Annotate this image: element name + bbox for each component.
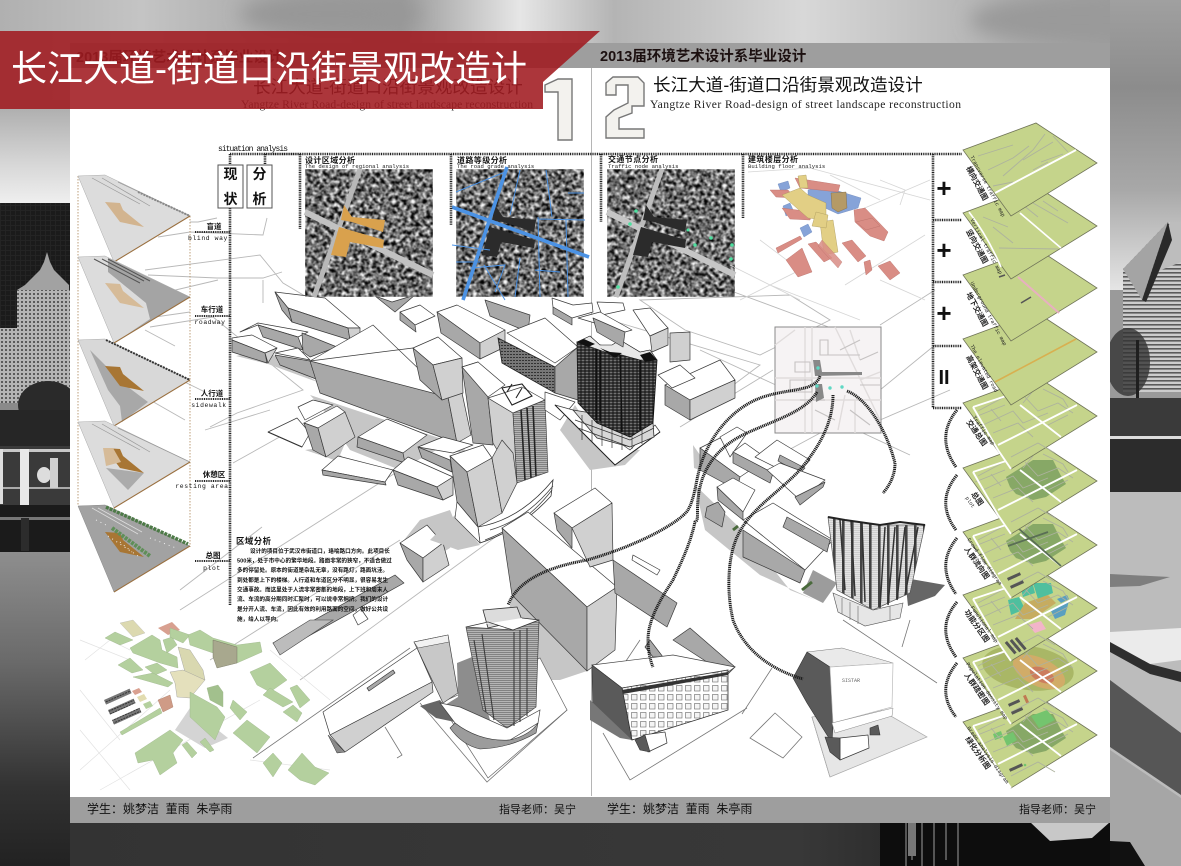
header right: school year title: 2013届环境艺术设计系毕业设计 — [600, 47, 807, 65]
operator: plus: + — [936, 235, 952, 265]
plate label: plot: plot — [964, 496, 976, 509]
mini-map legend — [104, 688, 153, 725]
tower 4 — [828, 517, 945, 626]
box: 分析 — [247, 165, 272, 208]
massing: middle right street blocks — [693, 427, 837, 603]
section plate: plot — [78, 505, 190, 592]
street section stack — [78, 175, 190, 592]
plate: transverse traffic — [963, 123, 1097, 216]
footer left: advisor: 指导老师：吴宁 — [499, 802, 576, 816]
tower 1 with curved podium — [430, 362, 553, 550]
big numeral 2 — [606, 77, 644, 138]
satellite image: regional analysis — [305, 169, 433, 297]
large slab and box over the fold — [502, 488, 677, 680]
plate label: underground traffic: Underground traffic map — [968, 281, 1007, 347]
green massing mini-map — [80, 620, 330, 790]
text block: regional analysis: 交通事故。而这里处于人流非常密集的地段，上下班和周末人 — [237, 586, 388, 594]
section plate: blind way — [78, 175, 190, 262]
label: blind way: 盲道 — [206, 221, 222, 231]
plate label: elevated road: The elevated road — [968, 344, 999, 393]
dotted structure lines — [195, 154, 962, 605]
caption: regional analysis: 设计区域分析 — [305, 155, 355, 165]
label: plot: 总图 — [206, 550, 220, 560]
footer right: advisor: 指导老师：吴宁 — [1019, 802, 1096, 816]
text block: regional analysis: 到处都是上下的楼梯。人行道和车道区分不明显，很容易发生 — [237, 576, 388, 584]
plate: green analysis — [963, 695, 1097, 788]
caption: road grade analysis: The road grade analysis — [457, 163, 534, 170]
poster sheet — [70, 43, 1110, 797]
ground plan lines — [145, 218, 950, 782]
label: plot: plot — [203, 565, 221, 572]
big numeral 1 — [545, 79, 572, 140]
text block: regional analysis: 500米，处于市中心的繁华地段。路面非常的狭窄，不适合做过 — [237, 556, 392, 564]
plate label: crowd flow: Crowd flow diagram — [965, 537, 1003, 587]
red title banner: 长江大道-街道口沿街景观改造计 — [11, 48, 527, 89]
operator: plus: + — [936, 173, 952, 203]
plate: traffic map — [963, 376, 1097, 469]
section heading: situation analysis: situation analysis — [218, 145, 288, 154]
header left: school year title: 2013届环境艺术设计系毕业设计 — [76, 48, 283, 66]
footer right: students: 学生：姚梦洁 董雨 朱亭雨 — [607, 801, 752, 816]
section plate: roadway — [78, 256, 190, 343]
caption: road grade analysis — [457, 155, 534, 170]
label: resting area — [175, 469, 229, 490]
label: sidewalk — [191, 388, 227, 409]
text block: regional analysis: 多的停留处。原本的街道是杂乱无章，没有路灯，路面坑洼。 — [237, 566, 388, 574]
plate: crowd flow — [963, 505, 1097, 598]
caption: traffic node analysis: Traffic node analysis — [608, 163, 678, 170]
plate label: traffic map — [964, 415, 995, 451]
label: resting area: resting area — [175, 483, 229, 490]
plate label: traffic map: Traffic map — [971, 415, 995, 447]
caption: building floor analysis: 建筑楼层分析 — [748, 154, 798, 164]
connecting dotted curves — [508, 376, 895, 679]
plate: population density — [963, 631, 1097, 724]
caption: traffic node analysis: 交通节点分析 — [608, 154, 658, 164]
plate label: green analysis: 绿化分析图 — [963, 734, 993, 771]
plate label: transverse traffic: Transverse traffic map — [968, 155, 1006, 218]
caption: regional analysis — [305, 155, 409, 170]
label: plot — [203, 550, 221, 572]
plate label: functional map: 功能分区图 — [962, 607, 992, 644]
operator: plus: + — [936, 298, 952, 328]
dark tower 2 with mall block — [498, 318, 660, 470]
plate label: plot: 总图 — [969, 489, 986, 507]
plate label: green analysis: Green analysis diagram — [965, 726, 1010, 785]
caption: traffic node analysis — [608, 154, 678, 170]
plate label: functional map: Functional map — [969, 605, 999, 644]
text block: regional analysis: 流、车流的高分期同时汇聚时，可以说非常拥挤。我们的设计 — [237, 595, 388, 603]
plate label: vertical traffic: Vertical traffic map — [968, 218, 1003, 276]
footer left: students: 学生：姚梦洁 董雨 朱亭雨 — [87, 801, 232, 816]
text block: regional analysis: 设计的项目位于武汉市街道口，珞喻路口方向。此项目长 — [250, 547, 390, 555]
label: sidewalk: sidewalk — [191, 402, 227, 409]
massing: big central slab and neighbours — [310, 295, 530, 470]
header right: english project title: Yangtze River Road-design of street landscape reconstruction — [650, 98, 961, 111]
red title banner — [0, 31, 600, 109]
long bar building bottom centre — [273, 620, 433, 753]
section plate: sidewalk — [78, 339, 190, 426]
caption: regional analysis: The design of regional analysis — [305, 163, 409, 170]
label: roadway: roadway — [194, 319, 226, 326]
plate: elevated road — [963, 312, 1097, 405]
label: roadway — [194, 304, 226, 326]
text block: regional analysis: 是分开人流、车流，因此有效的利用路面的空间，做好公共设 — [237, 605, 388, 613]
building floor analysis model — [730, 168, 930, 320]
plate label: elevated road: 高架交通图 — [964, 353, 991, 391]
label: blind way — [188, 221, 228, 242]
plate: underground traffic — [963, 248, 1097, 341]
label: roadway: 车行道 — [201, 304, 224, 314]
text block: regional analysis — [236, 536, 392, 623]
massing: upper left blocks — [232, 292, 360, 383]
label: blind way: blind way — [188, 235, 228, 242]
building 4: white gridded facade — [590, 628, 735, 752]
text block: regional analysis: 区域分析 — [236, 536, 272, 546]
plate label: population density: 人群疏密图 — [962, 670, 992, 707]
satellite image: road grade with blue roads — [452, 167, 589, 300]
box: 现状: 状 — [224, 191, 238, 207]
header right: chinese project title: 长江大道-街道口沿街景观改造设计 — [653, 75, 923, 95]
section plate: resting area — [78, 421, 190, 508]
label: resting area: 休憩区 — [203, 469, 226, 479]
building 5: shard white block: SISTAR — [842, 678, 860, 684]
tower 3 with curved podium — [414, 607, 567, 778]
massing: lower left blocks — [268, 400, 473, 652]
box: 分析: 析 — [252, 191, 266, 207]
plate label: plot — [964, 489, 986, 511]
plate label: traffic map: 交通总图 — [964, 417, 990, 448]
caption: road grade analysis: 道路等级分析 — [457, 155, 507, 165]
plate label: vertical traffic: 竖向交通图 — [964, 227, 991, 265]
label: sidewalk: 人行道 — [201, 388, 224, 398]
caption: building floor analysis — [748, 154, 825, 170]
stack of green analysis plates — [963, 123, 1097, 788]
plate: vertical traffic — [963, 186, 1097, 279]
massing: upper right small blocks — [552, 298, 735, 420]
header left: chinese project title: 长江大道-街道口沿街景观改造设计 — [253, 77, 523, 97]
plate label: transverse traffic: 横向交通图 — [964, 164, 991, 202]
satellite image: traffic nodes — [607, 169, 735, 297]
plate: plot — [963, 441, 1097, 534]
header left: english project title: Yangtze River Road-design of street landscape reconstruction — [241, 98, 533, 111]
text block: regional analysis: 施，给人以导向。 — [237, 615, 282, 623]
arcs linking plates — [946, 410, 957, 717]
caption: building floor analysis: Building floor analysis — [748, 163, 825, 170]
plate label: population density: Population density map — [964, 662, 1009, 721]
plate: functional zones — [963, 568, 1097, 661]
plate label: underground traffic: 地下交通图 — [964, 290, 991, 328]
box: 分析: 分 — [252, 166, 266, 182]
footer bar — [70, 797, 1110, 823]
inset location map — [775, 327, 881, 433]
box: 现状: 现 — [224, 166, 238, 182]
operator: equals: II — [938, 367, 950, 389]
box: 现状 — [218, 165, 243, 208]
building 5: shard white block — [793, 648, 927, 777]
plate label: crowd flow: 人群流向图 — [962, 544, 992, 581]
